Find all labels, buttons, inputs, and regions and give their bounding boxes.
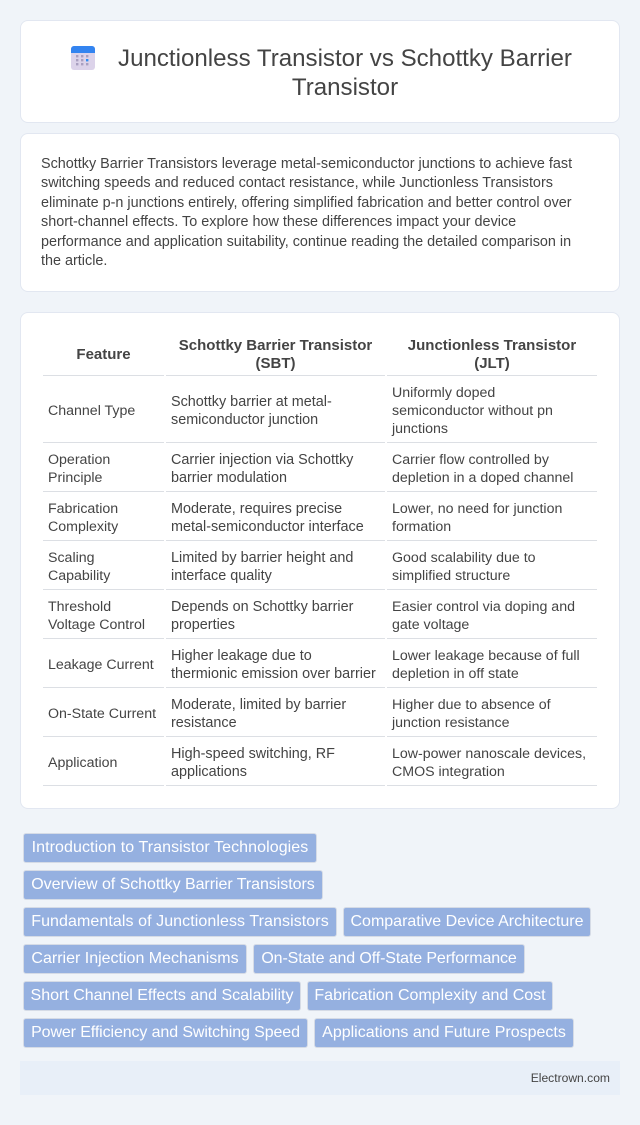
- row: application: Application: [48, 755, 117, 771]
- footer credit: Electrown.com: [531, 1071, 610, 1085]
- row: scaling capability: interface quality: [171, 568, 272, 584]
- row: leakage current: [48, 648, 580, 682]
- panel: topic tags: [23, 833, 591, 1048]
- text block: introduction: eliminate p-n junctions entirely, offering simplified fabrication and better control over: [41, 195, 572, 211]
- row: threshold voltage control: Easier control via doping and: [392, 599, 575, 615]
- text block: introduction: Schottky Barrier Transistors leverage metal-semiconductor junctions to achieve fast: [41, 156, 572, 172]
- row: threshold voltage control: gate voltage: [392, 617, 469, 633]
- row: channel type: Uniformly doped: [392, 385, 495, 401]
- panel: title card: [20, 20, 620, 123]
- row: threshold voltage control: Depends on Schottky barrier: [171, 599, 353, 615]
- table header: Feature: [76, 346, 131, 363]
- text block: introduction: the article.: [41, 253, 107, 269]
- text block: introduction: performance and application suitability, continue reading the detailed comparison in: [41, 234, 571, 250]
- title: Transistor: [292, 74, 398, 101]
- row: fabrication complexity: [48, 501, 562, 535]
- row: operation principle: Carrier flow controlled by: [392, 452, 549, 468]
- row: channel type: Channel Type: [48, 403, 135, 419]
- row: threshold voltage control: Voltage Control: [48, 617, 145, 633]
- row: channel type: Schottky barrier at metal-: [171, 394, 332, 410]
- row: channel type: [48, 385, 553, 437]
- text block: introduction: short-channel effects. To explore how these differences impact your device: [41, 214, 516, 230]
- tag: Overview of Schottky Barrier Transistors: [31, 876, 315, 893]
- tag: Short Channel Effects and Scalability: [31, 987, 293, 1004]
- row: operation principle: depletion in a doped channel: [392, 470, 573, 486]
- footer: [20, 1061, 620, 1095]
- row: channel type: junctions: [392, 421, 448, 437]
- row: fabrication complexity: Moderate, requires precise: [171, 501, 342, 517]
- row: channel type: semiconductor junction: [171, 412, 318, 428]
- tag: [23, 833, 317, 863]
- row: scaling capability: simplified structure: [392, 568, 510, 584]
- row: application: applications: [171, 764, 247, 780]
- row: scaling capability: Capability: [48, 568, 110, 584]
- row: threshold voltage control: [48, 599, 575, 633]
- tag: [343, 907, 591, 937]
- row: on-state current: resistance: [171, 715, 237, 731]
- tag: Fabrication Complexity and Cost: [314, 987, 546, 1004]
- row: threshold voltage control: Threshold: [48, 599, 111, 615]
- row: operation principle: barrier modulation: [171, 470, 287, 486]
- row: on-state current: Higher due to absence of: [392, 697, 551, 713]
- row: on-state current: Moderate, limited by barrier: [171, 697, 346, 713]
- row: on-state current: junction resistance: [392, 715, 510, 731]
- row: application: Low-power nanoscale devices,: [392, 746, 586, 762]
- table header: (SBT): [256, 355, 296, 372]
- tag: [23, 907, 337, 937]
- tag: [307, 981, 553, 1011]
- row: channel type: semiconductor without pn: [392, 403, 553, 419]
- panel: introduction: [20, 133, 620, 292]
- panel: comparison table: [20, 312, 620, 809]
- row: leakage current: Leakage Current: [48, 657, 154, 673]
- row: operation principle: Operation: [48, 452, 110, 468]
- text block: introduction: switching speeds and reduced contact resistance, while Junctionless Transistors: [41, 175, 553, 191]
- tag: [253, 944, 525, 974]
- row: fabrication complexity: formation: [392, 519, 451, 535]
- table header: Junctionless Transistor: [408, 337, 576, 354]
- text block: introduction: [41, 156, 572, 269]
- tag: [314, 1018, 574, 1048]
- tag: Introduction to Transistor Technologies: [32, 839, 308, 856]
- row: application: High-speed switching, RF: [171, 746, 335, 762]
- title: Junctionless Transistor vs Schottky Barrier: [118, 45, 572, 72]
- row: operation principle: Principle: [48, 470, 102, 486]
- table header: (JLT): [474, 355, 510, 372]
- tag: [23, 1018, 308, 1048]
- row: operation principle: Carrier injection via Schottky: [171, 452, 353, 468]
- row: leakage current: thermionic emission over barrier: [171, 666, 376, 682]
- row: fabrication complexity: Complexity: [48, 519, 118, 535]
- row: fabrication complexity: Fabrication: [48, 501, 118, 517]
- row: on-state current: [48, 697, 551, 731]
- row: leakage current: Higher leakage due to: [171, 648, 312, 664]
- row: fabrication complexity: Lower, no need for junction: [392, 501, 562, 517]
- table header: [76, 337, 576, 372]
- row: scaling capability: Good scalability due to: [392, 550, 536, 566]
- icon: calendar grid: [71, 46, 95, 70]
- tag: Applications and Future Prospects: [322, 1024, 566, 1041]
- tag: [23, 944, 247, 974]
- table header: Schottky Barrier Transistor: [179, 337, 372, 354]
- tag: Power Efficiency and Switching Speed: [31, 1024, 300, 1041]
- row: application: CMOS integration: [392, 764, 505, 780]
- row: threshold voltage control: properties: [171, 617, 235, 633]
- tag: [23, 981, 301, 1011]
- row: on-state current: On-State Current: [48, 706, 156, 722]
- tag: Carrier Injection Mechanisms: [31, 950, 239, 967]
- title: [118, 45, 572, 101]
- tag: On-State and Off-State Performance: [261, 950, 517, 967]
- row: fabrication complexity: metal-semiconductor interface: [171, 519, 364, 535]
- row: leakage current: Lower leakage because of full: [392, 648, 580, 664]
- row: scaling capability: Scaling: [48, 550, 95, 566]
- row: scaling capability: Limited by barrier height and: [171, 550, 353, 566]
- tag: [23, 870, 323, 900]
- row: operation principle: [48, 452, 573, 486]
- tag: Fundamentals of Junctionless Transistors: [31, 913, 329, 930]
- row: leakage current: depletion in off state: [392, 666, 519, 682]
- row: application: [48, 746, 586, 780]
- tag: Comparative Device Architecture: [350, 913, 583, 930]
- row: scaling capability: [48, 550, 536, 584]
